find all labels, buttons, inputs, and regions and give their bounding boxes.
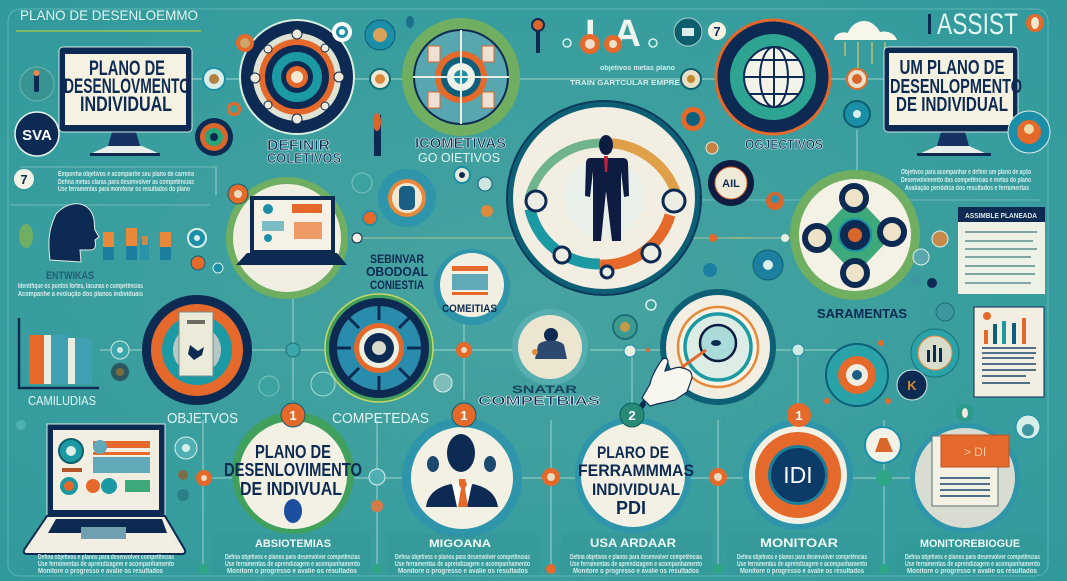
small figure icon (20, 67, 54, 101)
circle: silhouette group (512, 309, 588, 385)
small ring icon right (824, 340, 891, 406)
circle: laptop (226, 177, 348, 299)
title: PLANO DE DESENLOEMMO (20, 7, 198, 23)
step marker icons (369, 415, 1040, 512)
caption column 1: Defina objetivos e planos para desenvolver competências (38, 554, 174, 561)
mini chart and badge (897, 329, 959, 400)
caption column 4: Monitore o progresso e avalie os resultados (573, 568, 699, 575)
text: faint subheading (570, 65, 680, 87)
circle: globe (716, 20, 830, 134)
step circle 1: plano de desenvolvimento: DESENLOVIMENTO (224, 460, 362, 480)
label: objetivos: OGJECTIVOS (745, 136, 823, 152)
number badge: 1 (289, 408, 297, 423)
caption column 4 (561, 533, 711, 575)
label: selecionar competencias: SNATAR (512, 384, 577, 396)
heading IA (532, 13, 726, 55)
number badge: 1 (460, 408, 468, 423)
circle: competencias (434, 249, 510, 325)
small markers between circles (259, 342, 472, 396)
label: objetivos: OBJETVOS (167, 410, 238, 427)
label: colunas: CAMILUDIAS (28, 393, 96, 408)
document right (958, 207, 1045, 294)
step circle 4: IDI: IDI (783, 462, 813, 488)
label and text under head (18, 270, 143, 298)
monitor: um plano de desenvolvimento: DE INDIVIDUAL (896, 94, 1008, 116)
person in suit (585, 135, 629, 241)
monitor: plano de desenvolvimento individual: PLANO DE (89, 57, 165, 80)
monitor: plano de desenvolvimento individual: DESENLOVMENTO (64, 75, 190, 98)
node icons (526, 190, 685, 278)
step circle 1: plano de desenvolvimento: DE INDIVUAL (240, 479, 342, 499)
laptop bottom left (24, 424, 185, 554)
step circle 3: plano de ferramentas (575, 403, 694, 533)
circle: target with pointing hand (634, 289, 776, 415)
icon: orange round right of monitor (1008, 111, 1050, 153)
label: competencias: COMPETEDAS (332, 410, 429, 427)
cloud (834, 21, 897, 72)
caption column 4: Defina objetivos e planos para desenvolver competências (570, 554, 702, 561)
small icons near document (911, 231, 954, 321)
small icons left of bottom row (16, 420, 212, 501)
step circle 3: plano de ferramentas: FERRAMMMAS (578, 461, 694, 480)
caption column 6 (895, 533, 1045, 575)
caption column 5: MONITOAR (760, 536, 838, 550)
label: competitivas (415, 135, 506, 165)
caption column 5 (727, 533, 879, 575)
text block left: Emponha objetivos e acompanhe seu plano de carreira (58, 171, 194, 178)
caption column 5: Monitore o progresso e avalie os resultados (740, 568, 864, 575)
number badge: 1 (795, 408, 803, 423)
label and text under head: ENTWIKAS (46, 270, 94, 282)
label: selecionar objetivos: CONIESTIA (370, 278, 424, 292)
circle: definir objetivos (240, 20, 354, 134)
label: definir objetivos (267, 137, 341, 167)
caption column 2: Use ferramentas de aprendizagem e acompanhamento (225, 561, 360, 568)
small icons around globe (681, 69, 870, 154)
step circle 1: plano de desenvolvimento (224, 403, 362, 534)
monitor: plano de desenvolvimento individual: INDIVIDUAL (80, 93, 172, 116)
label: selecionar competencias: COMPETBIAS (478, 393, 600, 408)
small icons around circle one (195, 16, 414, 156)
text: faint subheading: objetivos metas plano (600, 65, 675, 72)
caption column 4: USA ARDAAR (590, 536, 676, 550)
monitor: um plano de desenvolvimento: DESENLOPMENTO (890, 76, 1022, 98)
label: selecionar competencias (478, 384, 600, 408)
icons around laptop (188, 167, 493, 273)
caption column 5: Defina objetivos e planos para desenvolver competências (737, 554, 867, 561)
caption column 4: Use ferramentas de aprendizagem e acompanhamento (570, 561, 702, 568)
bottom node dots (198, 564, 889, 574)
step circle 3: plano de ferramentas: PDI (616, 498, 646, 518)
number badge: 2 (628, 408, 636, 423)
label: ferramentas: SARAMENTAS (817, 306, 907, 321)
caption column 6: MONITOREBIOGUE (920, 538, 1020, 550)
bar chart left (19, 318, 99, 388)
circle: central person (507, 101, 701, 295)
text block right (901, 169, 1031, 192)
caption column 3: Defina objetivos e planos para desenvolver competências (395, 554, 530, 561)
caption column 2: Defina objetivos e planos para desenvolver competências (225, 554, 360, 561)
caption column 2: ABSIOTEMIAS (255, 538, 331, 550)
number badge (14, 169, 34, 189)
text block right: Avaliação periódica dos resultados e ferramentas (905, 185, 1029, 192)
small icons near chart (111, 341, 129, 381)
badge SVA (15, 112, 59, 156)
mini chart and badge: K (907, 378, 917, 393)
step circle 5: document (910, 404, 1020, 533)
small orange icon (703, 192, 789, 280)
caption column 3: MIGOANA (429, 538, 491, 550)
step circle 1: plano de desenvolvimento: PLANO DE (255, 442, 331, 462)
step circle 5: document: > DI (964, 445, 986, 459)
circle: competencias: COMEITIAS (442, 303, 497, 315)
step circle 2: person (402, 403, 522, 538)
label: definir objetivos: DEFINIR (267, 137, 330, 154)
icons right of silhouette (613, 300, 804, 357)
monitor: um plano de desenvolvimento: UM PLANO DE (900, 57, 1004, 79)
caption column 1: Monitore o progresso e avalie os resultados (38, 568, 163, 575)
document right: ASSIMBLE PLANEADA (965, 213, 1037, 220)
caption column 6: Monitore o progresso e avalie os resultados (907, 568, 1037, 575)
badge SVA: SVA (22, 127, 52, 144)
circle: objetivos dial (402, 18, 520, 136)
badge AIL: AIL (722, 178, 740, 190)
label and text under head: Identifique os pontos fortes, lacunas e competências (18, 283, 143, 290)
head silhouette with bars (19, 204, 171, 262)
icon: hand (634, 358, 692, 415)
label: selecionar objetivos (366, 252, 428, 292)
text block left: Use ferramentas para monitorar os resultados do plano (58, 186, 190, 193)
circle: green network (790, 170, 920, 300)
caption column 3 (387, 533, 540, 575)
monitor: plano de desenvolvimento individual (59, 47, 192, 156)
monitor: um plano de desenvolvimento (884, 47, 1022, 156)
text block left: Defina metas claras para desenvolver as competências (58, 179, 194, 186)
caption column 5: Use ferramentas de aprendizagem e acompanhamento (737, 561, 867, 568)
step circle 3: plano de ferramentas: INDIVIDUAL (592, 480, 680, 499)
document chart (974, 307, 1044, 397)
caption column 1: Use ferramentas de aprendizagem e acompanhamento (38, 561, 174, 568)
text: faint subheading: TRAIN GARTCULAR EMPRE (570, 80, 680, 87)
step circle 4: IDI (743, 403, 853, 530)
number badge: 7 (20, 172, 28, 187)
circle: competencias dial (325, 294, 433, 402)
step circle 3: plano de ferramentas: PLARO DE (597, 443, 669, 462)
label: definir objetivos: COLETIVOS (267, 150, 341, 167)
caption column 2 (213, 533, 370, 575)
caption column 1 (38, 554, 174, 575)
caption column 2: Monitore o progresso e avalie os resultados (227, 568, 357, 575)
heading IA: IA (585, 13, 641, 55)
heading IA: 7 (713, 24, 721, 39)
caption column 3: Monitore o progresso e avalie os resultados (398, 568, 528, 575)
label: competitivas: GO OIETIVOS (418, 150, 500, 165)
text block left (58, 171, 194, 193)
badge AIL (708, 160, 754, 206)
caption column 3: Use ferramentas de aprendizagem e acompanhamento (395, 561, 530, 568)
circle: document target (142, 295, 252, 405)
label and text under head: Acompanhe a evolução dos planos individuais (18, 291, 143, 298)
heading ASSIST: ASSIST (937, 8, 1018, 41)
label: selecionar objetivos: OBODOAL (366, 264, 428, 279)
label: competitivas: ICOMETIVAS (415, 135, 506, 152)
label: selecionar objetivos: SEBINVAR (370, 252, 424, 266)
